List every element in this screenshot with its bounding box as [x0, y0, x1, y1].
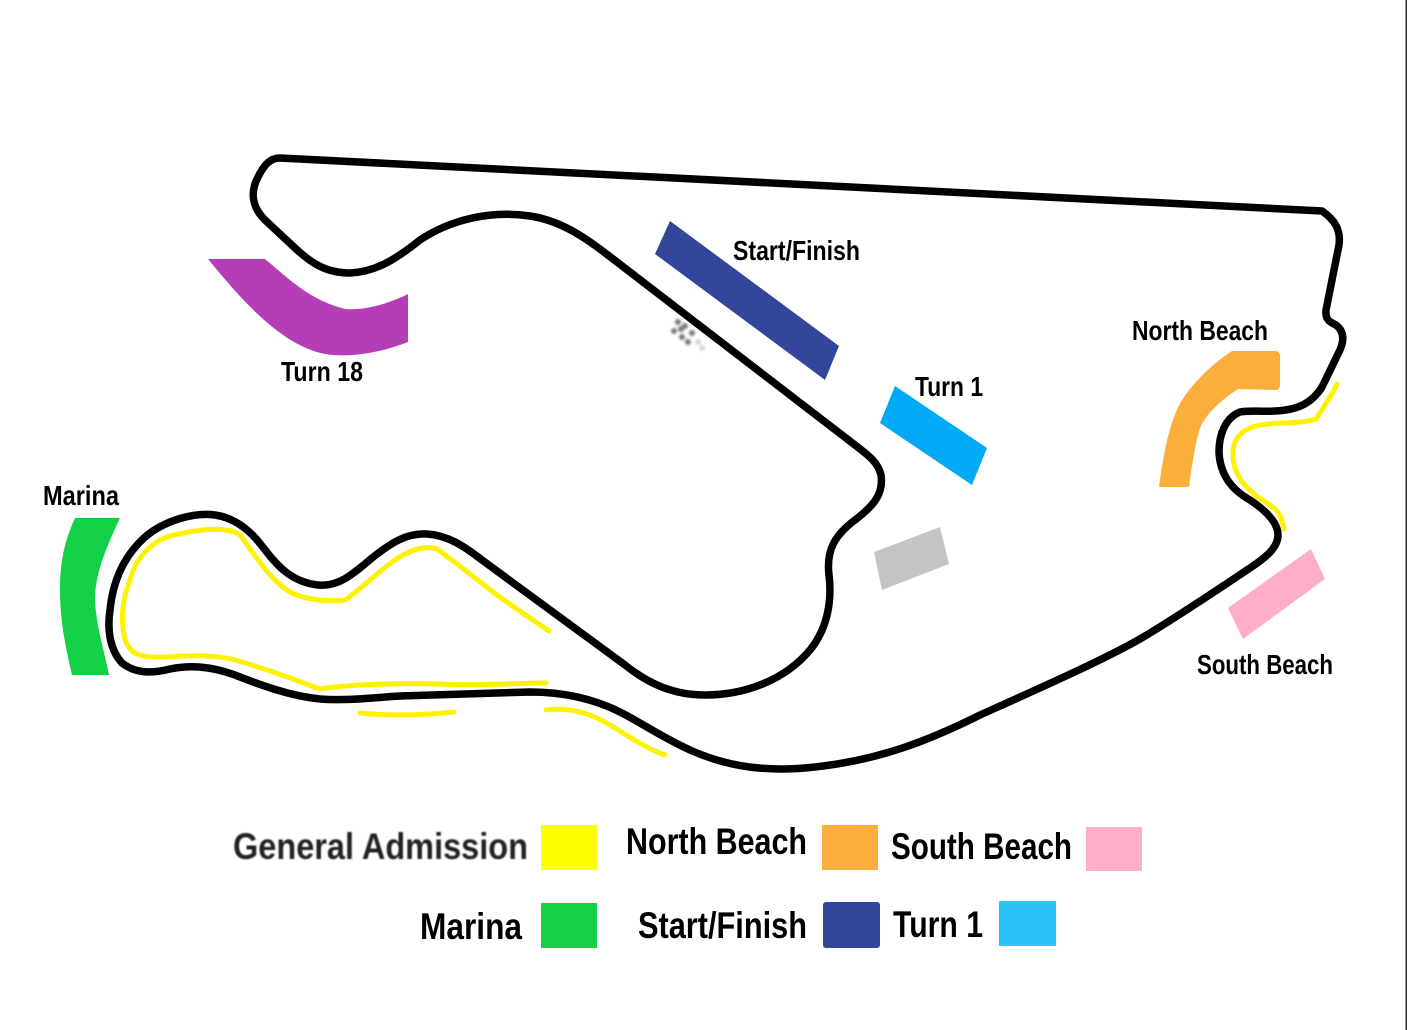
- legend item: South Beach: South Beach: [891, 826, 1072, 867]
- map label: North Beach: North Beach: [1132, 315, 1268, 346]
- map label: Turn 1: Turn 1: [915, 371, 983, 402]
- icon: checkered flag: [671, 319, 705, 351]
- seating area: Turn 18: [208, 259, 408, 355]
- seating area: North Beach: [1159, 351, 1280, 487]
- legend item: North Beach: North Beach: [626, 821, 807, 862]
- seating area: Start/Finish: [655, 221, 839, 380]
- legend item: General Admission: General Admission: [233, 826, 528, 867]
- legend item: Turn 1: Turn 1: [893, 904, 983, 945]
- map label: Turn 18: Turn 18: [281, 356, 363, 387]
- legend item: Turn 1: [893, 901, 1056, 946]
- race track outline: [109, 158, 1343, 769]
- legend item: Marina: [420, 903, 597, 948]
- map label: Start/Finish: Start/Finish: [733, 235, 860, 266]
- seating area: unlabelled grey: [874, 527, 949, 590]
- legend: [233, 821, 1142, 948]
- stand: east hairpin: [1233, 384, 1337, 529]
- seating area: Marina: [60, 518, 120, 675]
- map label: Marina: Marina: [43, 480, 119, 511]
- seating area: South Beach: [1228, 549, 1325, 639]
- seating area: Turn 1: [880, 386, 987, 485]
- stand: inner infield: [122, 529, 549, 689]
- stand: outer bend: [546, 709, 665, 755]
- general admission stands: [122, 384, 1337, 755]
- stand: outer straight: [360, 712, 454, 715]
- legend item: Marina: Marina: [420, 906, 522, 947]
- legend item: Start/Finish: Start/Finish: [638, 905, 807, 946]
- map label: South Beach: South Beach: [1197, 649, 1333, 680]
